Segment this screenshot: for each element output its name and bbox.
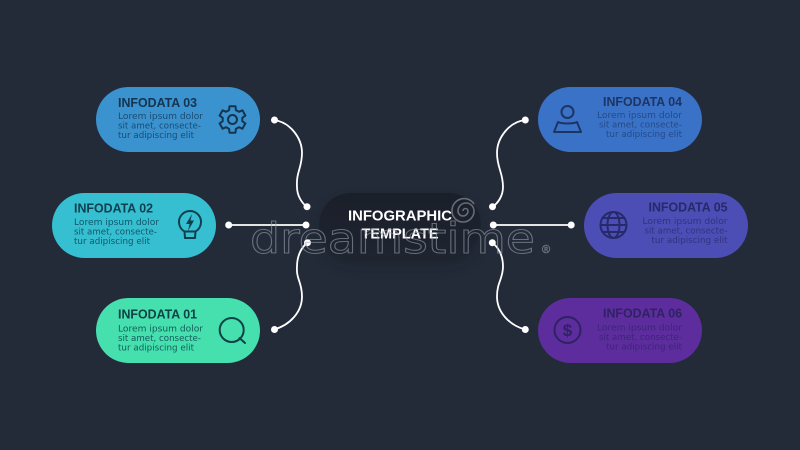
connector: infodata 04 <box>489 116 529 210</box>
text block: infodata 03: Lorem ipsum dolor <box>118 112 203 122</box>
text block: infodata 05: tur adipiscing elit <box>652 236 728 246</box>
panel: infodata 06 <box>538 298 702 363</box>
heading: infodata 04: INFODATA 04 <box>603 94 683 109</box>
text block: infodata 04: sit amet, consecte- <box>599 120 682 130</box>
connector: infodata 03 <box>271 116 310 210</box>
panel: infodata 04 <box>538 87 702 152</box>
text block: infodata 06: tur adipiscing elit <box>606 342 683 352</box>
text block: infodata 05: sit amet, consecte- <box>644 227 728 237</box>
text block: infodata 01: sit amet, consecte- <box>118 334 201 344</box>
watermark <box>250 199 550 263</box>
text block: infodata 06: Lorem ipsum dolor <box>597 324 682 334</box>
watermark spiral <box>452 199 474 222</box>
text block: infodata 01: tur adipiscing elit <box>118 344 195 354</box>
icon: magnifier <box>220 318 245 343</box>
text block: infodata 06: sit amet, consecte- <box>599 333 682 343</box>
text block: infodata 05 <box>642 217 728 246</box>
heading: infodata 06: INFODATA 06 <box>603 306 682 320</box>
watermark: dreamstime <box>250 214 535 263</box>
text block: infodata 05: Lorem ipsum dolor <box>642 217 728 227</box>
connector: infodata 02 <box>225 222 310 228</box>
text block: infodata 02 <box>74 218 159 247</box>
text block: infodata 02: sit amet, consecte- <box>74 228 157 238</box>
connector: infodata 01 <box>271 239 311 333</box>
watermark registered mark: ® <box>542 244 550 256</box>
text block: infodata 03: tur adipiscing elit <box>118 131 195 141</box>
heading: infodata 02: INFODATA 02 <box>74 200 153 216</box>
icon: globe <box>600 212 626 238</box>
heading: infographic template: INFOGRAPHIC <box>348 208 452 224</box>
heading: infodata 01: INFODATA 01 <box>118 306 197 322</box>
panel: infodata 01 <box>96 298 260 363</box>
text block: infodata 02: tur adipiscing elit <box>74 237 151 247</box>
text block: infodata 04: Lorem ipsum dolor <box>597 111 682 121</box>
text block: infodata 03: sit amet, consecte- <box>118 122 201 132</box>
text block: infodata 03 <box>118 112 203 141</box>
connector: infodata 05 <box>490 222 575 228</box>
text block: infodata 06 <box>597 324 683 352</box>
icon: light bulb <box>179 211 201 238</box>
heading: infodata 05: INFODATA 05 <box>648 200 728 214</box>
text block: infodata 04: tur adipiscing elit <box>606 130 683 140</box>
central panel <box>319 193 481 264</box>
heading: infographic template <box>348 208 452 242</box>
icon: dollar coin <box>554 317 580 343</box>
heading: infodata 03: INFODATA 03 <box>118 95 197 110</box>
icon: gear <box>220 106 245 133</box>
heading: infographic template: TEMPLATE <box>362 226 438 242</box>
text block: infodata 02: Lorem ipsum dolor <box>74 218 159 228</box>
panel: infodata 05 <box>584 193 748 258</box>
text block: infodata 01: Lorem ipsum dolor <box>118 324 203 334</box>
panel: infodata 03 <box>96 87 260 152</box>
panel: infodata 02 <box>52 193 216 258</box>
text block: infodata 04 <box>597 111 683 140</box>
icon: dollar coin: $ <box>563 321 573 340</box>
icon: person <box>554 106 581 132</box>
text block: infodata 01 <box>118 324 203 354</box>
connector: infodata 06 <box>489 239 529 333</box>
